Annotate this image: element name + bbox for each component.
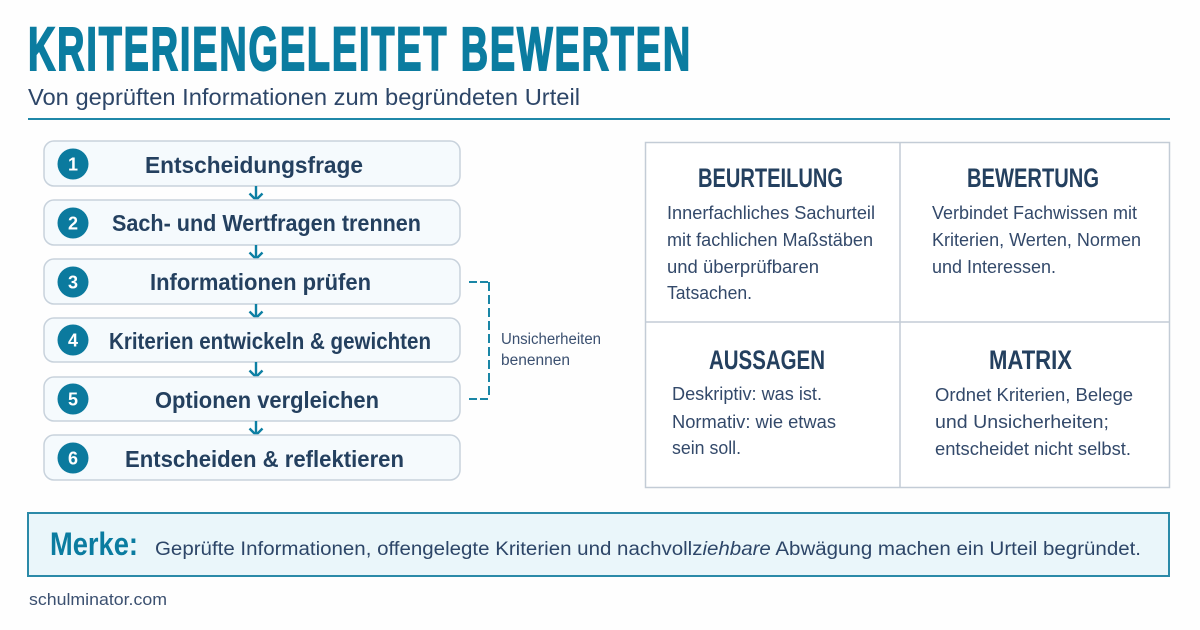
bracket label: benennen: [501, 352, 570, 369]
arrow 5: [250, 421, 262, 435]
step 5: Optionen vergleichen: [155, 387, 379, 413]
cell: Beurteilung: Innerfachliches Sachurteil: [667, 203, 875, 223]
cell: Matrix: Ordnet Kriterien, Belege: [935, 385, 1133, 405]
cell: Beurteilung: und überprüfbaren: [667, 257, 819, 277]
cell: Aussagen: [672, 345, 836, 458]
arrow 3: [250, 304, 262, 318]
step 2: Sach- und Wertfragen trennen: [112, 210, 421, 236]
step 5: [44, 377, 460, 421]
cell: Matrix: entscheidet nicht selbst.: [935, 439, 1131, 459]
cell: Matrix: und Unsicherheiten;: [935, 412, 1109, 432]
step 1: [44, 141, 460, 186]
cell: Bewertung: und Interessen.: [932, 257, 1056, 277]
cell: Beurteilung: [667, 163, 875, 303]
cell: Bewertung: [932, 163, 1141, 277]
arrow 4: [250, 362, 262, 377]
step 5: 5: [68, 390, 78, 410]
cell: Aussagen: sein soll.: [672, 438, 741, 458]
callout: Merke: Geprüfte Informationen, offengelegte Kriterien und nachvollz iehbare Abwägung machen ein Urteil begründet.: [155, 539, 1141, 560]
step 2: [44, 200, 460, 245]
step 2: 2: [68, 214, 78, 234]
step 6: Entscheiden & reflektieren: [125, 446, 404, 472]
cell: Matrix: MATRIX: [989, 345, 1072, 375]
arrow 2: [250, 245, 262, 259]
panel: process steps: [44, 141, 460, 480]
step 4: 4: [68, 330, 78, 350]
callout: Merke: [28, 513, 1169, 576]
step 3: Informationen prüfen: [150, 269, 371, 295]
step 1: 1: [68, 154, 78, 174]
subtitle: Von geprüften Informationen zum begründeten Urteil: [28, 84, 580, 110]
cell: Aussagen: AUSSAGEN: [709, 345, 825, 375]
title: KRITERIENGELEITET BEWERTEN: [28, 15, 690, 83]
footer: source: schulminator.com: [29, 590, 167, 609]
step 4: [44, 318, 460, 362]
step 4: Kriterien entwickeln & gewichten: [109, 328, 431, 354]
cell: Matrix: [935, 345, 1133, 459]
cell: Beurteilung: Tatsachen.: [667, 283, 752, 303]
cell: Beurteilung: mit fachlichen Maßstäben: [667, 230, 873, 250]
cell: Aussagen: Deskriptiv: was ist.: [672, 384, 822, 404]
step 3: [44, 259, 460, 304]
step 3: 3: [68, 272, 78, 292]
step 6: 6: [68, 448, 78, 468]
arrow 1: [250, 186, 262, 200]
step 1: Entscheidungsfrage: [145, 152, 363, 178]
cell: Bewertung: BEWERTUNG: [967, 163, 1099, 193]
callout: Merke: Merke:: [50, 526, 138, 562]
cell: Aussagen: Normativ: wie etwas: [672, 412, 836, 432]
panel: matrix grid: [645, 142, 1170, 488]
cell: Bewertung: Kriterien, Werten, Normen: [932, 230, 1141, 250]
bracket label: [501, 331, 601, 369]
cell: Beurteilung: BEURTEILUNG: [698, 163, 843, 193]
cell: Bewertung: Verbindet Fachwissen mit: [932, 203, 1137, 223]
bracket label: Unsicherheiten: [501, 331, 601, 348]
bracket: uncertainty: [469, 282, 489, 399]
step 6: [44, 435, 460, 480]
